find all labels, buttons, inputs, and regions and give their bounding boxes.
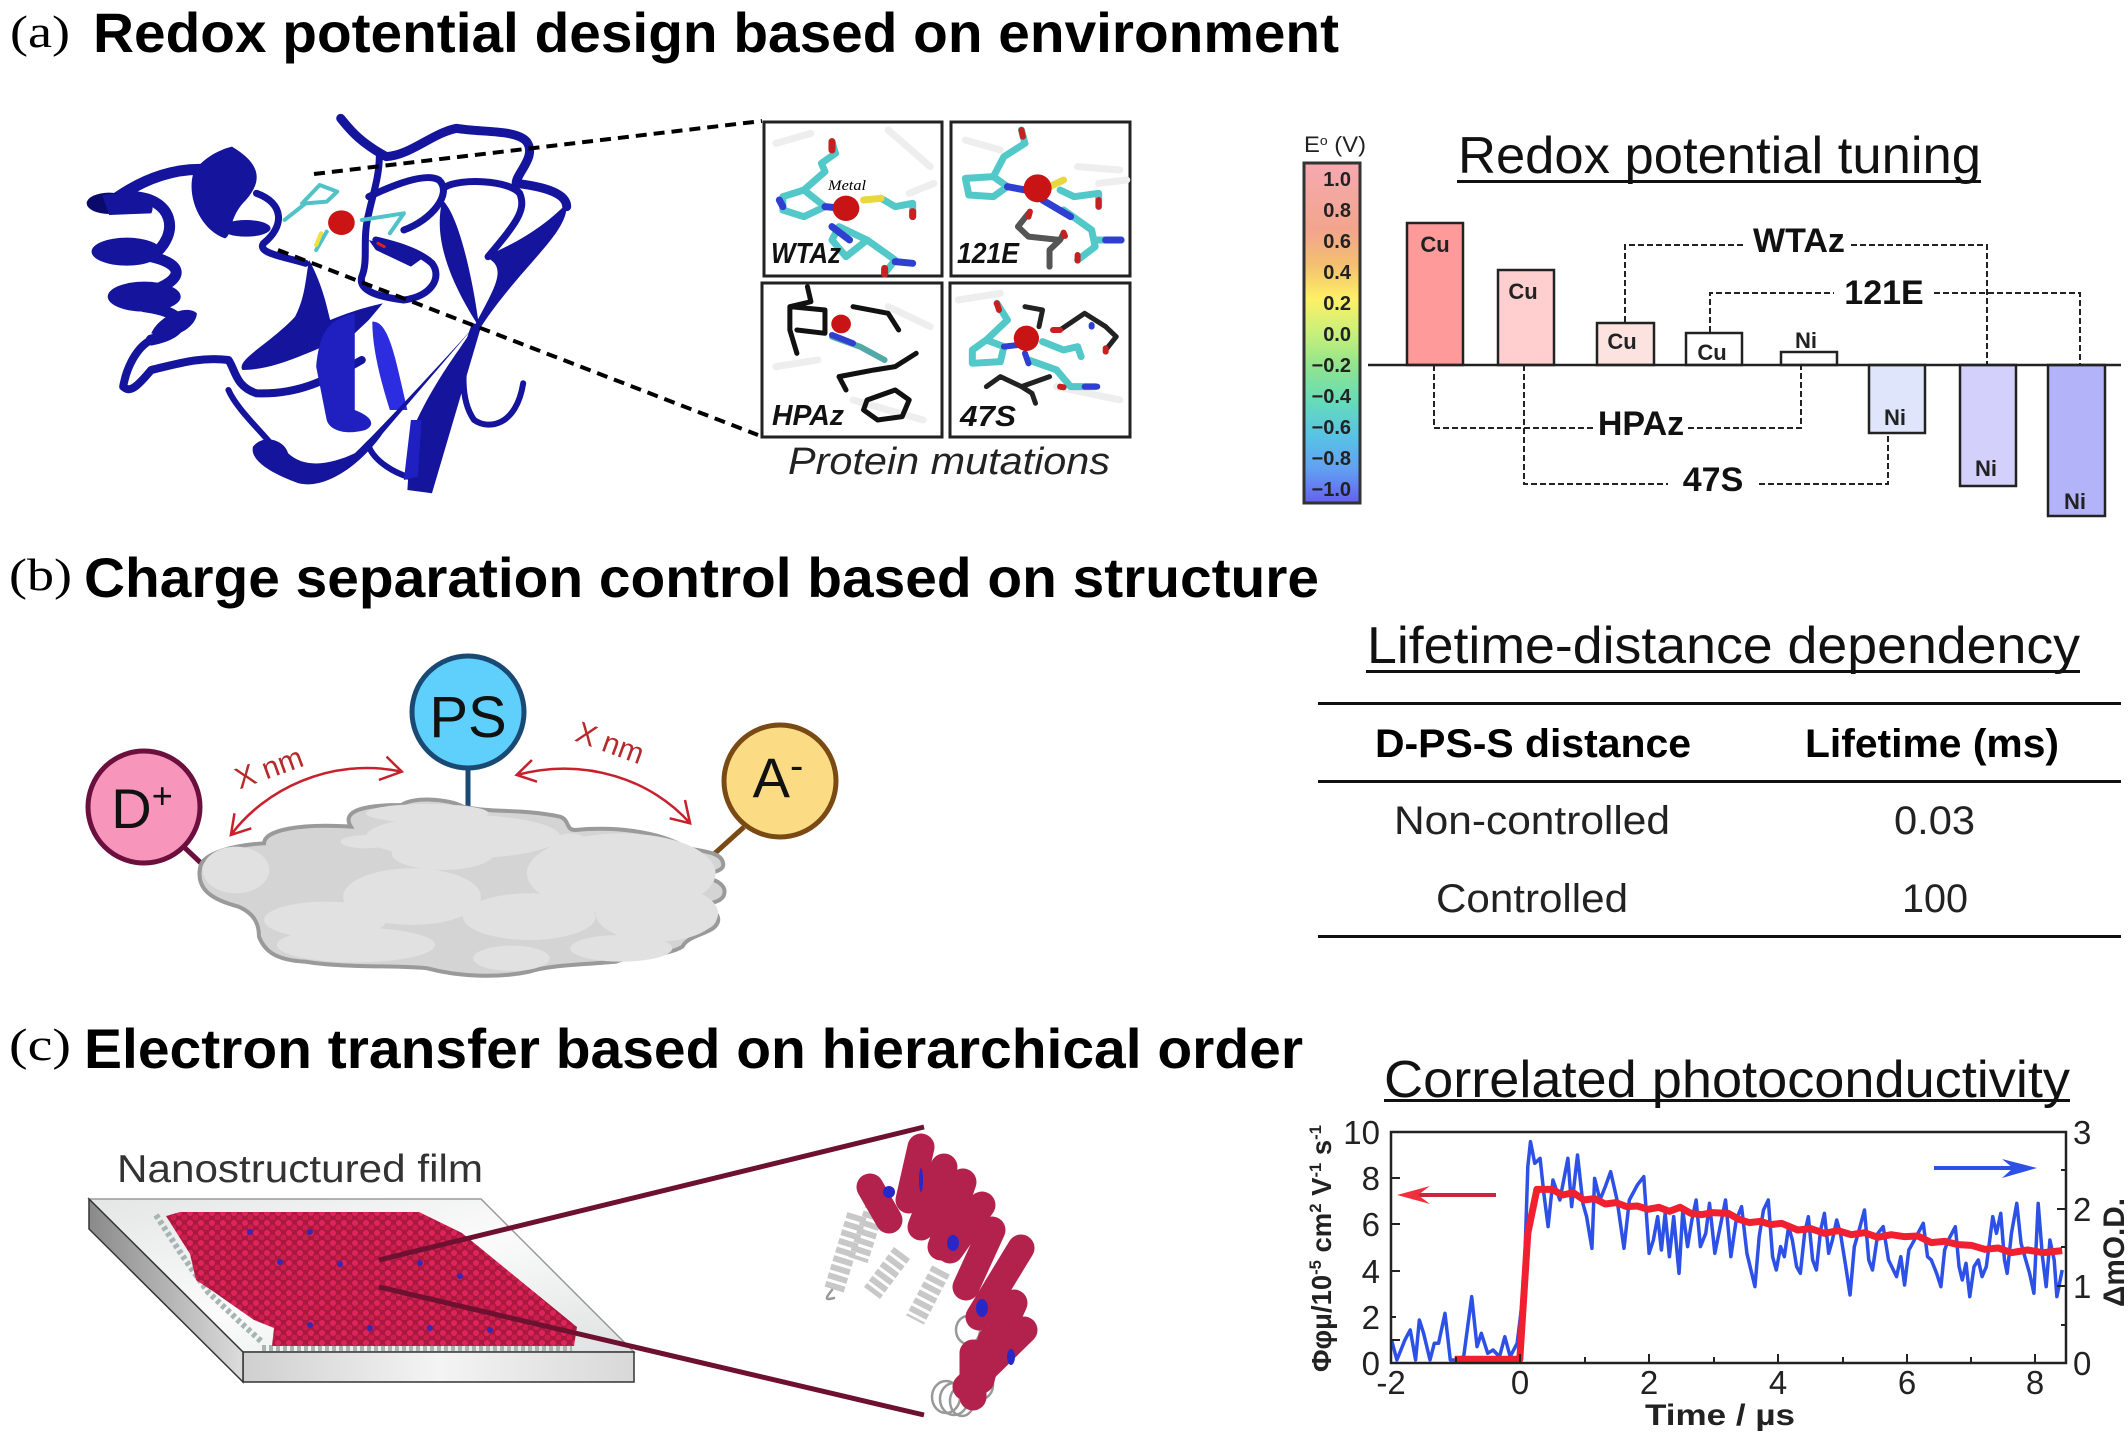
label: HPAz: HPAz <box>772 400 844 432</box>
colour scale: −0.2 <box>1312 355 1351 377</box>
node: PS: PS <box>429 685 507 750</box>
heading: redox potential tuning: Redox potential tuning <box>1458 127 1981 185</box>
protein cloud <box>199 800 725 976</box>
connector: 121E <box>1710 274 2080 365</box>
x axis numbers: 6 <box>1898 1364 1916 1401</box>
node: PS <box>412 656 524 768</box>
arrow: PS to A distance <box>517 716 690 823</box>
connector: WTAz <box>1625 222 1987 365</box>
x axis numbers: 0 <box>1511 1364 1529 1401</box>
inset WTAz <box>764 122 942 276</box>
right axis numbers: 2 <box>2073 1191 2091 1228</box>
left axis numbers: 2 <box>1362 1299 1380 1336</box>
insets: protein mutations <box>762 122 1130 437</box>
panel label (a): (a) <box>10 6 70 57</box>
redox bar chart: Cu <box>1607 329 1637 354</box>
table: lifetime vs distance: Non-controlled <box>1394 799 1670 843</box>
redox bar chart: Ni <box>2064 489 2086 514</box>
arrow: blue trace to right axis <box>1934 1159 2037 1178</box>
scale unit: (V) <box>1328 132 1366 157</box>
redox bar chart: Ni <box>1975 456 1997 481</box>
x axis numbers <box>1376 1364 2044 1401</box>
panel label (c): (c) <box>9 1019 71 1070</box>
heading: correlated photoconductivity: Correlated photoconductivity <box>1384 1051 2070 1109</box>
arrow: D to PS distance <box>231 741 402 835</box>
arrow: PS to A distance: X nm <box>571 716 648 771</box>
redox bar chart: Cu <box>1508 279 1538 304</box>
heading (b): Charge separation control based on structure <box>84 546 1319 609</box>
panel: (b) charge separation control <box>9 546 2121 976</box>
label: WTAz: WTAz <box>771 238 841 270</box>
left axis title: -1 <box>1306 1125 1325 1140</box>
table: lifetime vs distance: Lifetime (ms) <box>1805 722 2059 766</box>
node: A-: A <box>753 746 790 809</box>
label: Metal: Metal <box>827 178 866 194</box>
x axis numbers: -2 <box>1376 1364 1406 1401</box>
left axis title: -5 <box>1306 1260 1325 1275</box>
colour scale: 0.8 <box>1323 200 1351 222</box>
node: D+: D <box>111 777 152 840</box>
x axis numbers: 4 <box>1769 1364 1787 1401</box>
caption: nanostructured film: Nanostructured film <box>117 1148 483 1191</box>
caption: protein mutations: Protein mutations <box>788 441 1110 483</box>
left axis title: Φφμ/10 <box>1306 1273 1337 1372</box>
axes frame <box>1391 1132 2066 1363</box>
film slab <box>89 1199 634 1382</box>
left axis numbers <box>1343 1114 1380 1382</box>
inset HPAz <box>762 283 942 437</box>
panel: (c) electron transfer <box>9 1017 2128 1432</box>
dashed zoom lines <box>278 121 762 435</box>
protein ribbon structure <box>87 118 567 493</box>
connector: HPAz: HPAz <box>1598 405 1684 443</box>
right axis numbers <box>2073 1114 2091 1382</box>
zoom lines from film to fibre <box>379 1127 924 1415</box>
right axis numbers: 3 <box>2073 1114 2091 1151</box>
protein fibre close-up <box>827 1147 1024 1416</box>
left axis numbers: 8 <box>1362 1160 1380 1197</box>
connector: WTAz: WTAz <box>1753 222 1845 260</box>
inset 47S <box>950 283 1130 437</box>
x axis numbers: 8 <box>2026 1364 2044 1401</box>
colour scale: 1.0 <box>1323 169 1351 191</box>
stems <box>185 768 744 864</box>
left axis title: s <box>1306 1140 1337 1163</box>
label: 121E: 121E <box>957 238 1021 270</box>
redox bar chart: Ni <box>1795 328 1817 353</box>
label: 47S: 47S <box>959 401 1017 433</box>
colour scale: 0.6 <box>1323 231 1351 253</box>
node: D+: + <box>152 775 173 816</box>
colour scale: 0.4 <box>1323 262 1352 284</box>
left axis numbers: 10 <box>1343 1114 1380 1151</box>
colour scale: −0.4 <box>1312 386 1352 408</box>
line chart: photoconductivity vs time <box>1306 1114 2128 1432</box>
left axis title: cm <box>1306 1213 1337 1260</box>
traces <box>1392 1142 2062 1360</box>
left axis title: -1 <box>1306 1163 1325 1178</box>
connector: 47S: 47S <box>1683 461 1743 499</box>
connector: 47S <box>1524 365 1888 499</box>
scale unit: o <box>1320 133 1328 148</box>
colour scale: 0.2 <box>1323 293 1351 315</box>
redox bar chart: Ni <box>1884 405 1906 430</box>
node: D+ <box>88 751 200 863</box>
x axis numbers: 2 <box>1640 1364 1658 1401</box>
scale unit: E <box>1304 132 1319 157</box>
node: A-: - <box>790 744 803 788</box>
arrow: D to PS distance: X nm <box>231 741 308 796</box>
colour scale: 0.0 <box>1323 324 1351 346</box>
redox bar chart <box>1368 222 2121 516</box>
inset 121E <box>951 122 1130 276</box>
redox bar chart: Cu <box>1420 232 1450 257</box>
left axis numbers: 6 <box>1362 1206 1380 1243</box>
left axis title: 2 <box>1306 1203 1325 1213</box>
connector: 121E: 121E <box>1844 274 1924 312</box>
heading (c): Electron transfer based on hierarchical order <box>84 1017 1303 1080</box>
left axis numbers: 0 <box>1362 1345 1380 1382</box>
left axis numbers: 4 <box>1362 1253 1380 1290</box>
left axis title: V <box>1306 1177 1337 1203</box>
heading: lifetime-distance dependency: Lifetime-distance dependency <box>1367 617 2080 675</box>
colour scale <box>1304 132 1366 503</box>
node: A- <box>724 725 836 837</box>
arrow: red trace to left axis <box>1397 1186 1496 1204</box>
panel: (a) redox potential design <box>10 1 2121 516</box>
redox bar chart: Cu <box>1697 340 1727 365</box>
molecular layer on film <box>156 1212 577 1348</box>
colour scale: −0.6 <box>1312 417 1351 439</box>
table: lifetime vs distance: 0.03 <box>1894 799 1975 843</box>
connector: HPAz <box>1434 365 1801 443</box>
panel label (b): (b) <box>9 549 72 600</box>
right axis numbers: 0 <box>2073 1345 2091 1382</box>
table: lifetime vs distance: Controlled <box>1436 877 1628 921</box>
heading (a): Redox potential design based on environment <box>93 1 1339 64</box>
x axis title: Time / µs <box>1645 1399 1795 1432</box>
right axis numbers: 1 <box>2073 1268 2091 1305</box>
table: lifetime vs distance: 100 <box>1902 877 1968 921</box>
colour scale: −0.8 <box>1312 448 1351 470</box>
table: lifetime vs distance <box>1318 702 2121 938</box>
colour scale: −1.0 <box>1312 479 1351 501</box>
table: lifetime vs distance: D-PS-S distance <box>1375 722 1691 766</box>
